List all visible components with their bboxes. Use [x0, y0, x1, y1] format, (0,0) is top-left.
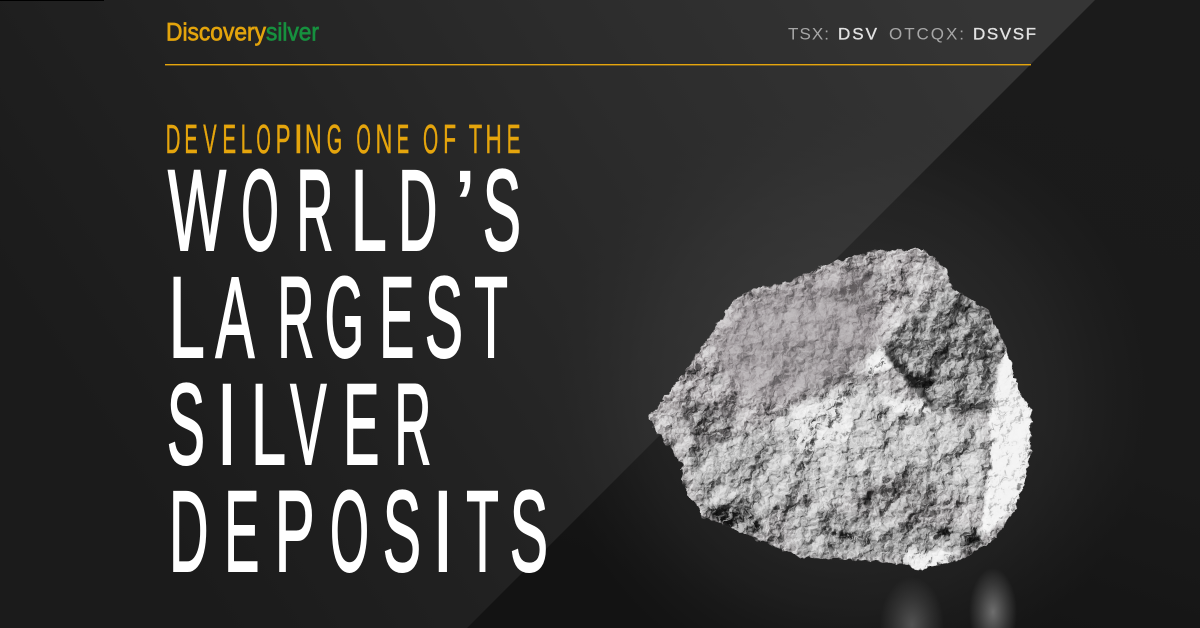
flat upper plane of the rock	[713, 270, 880, 403]
subtitle: F	[443, 116, 456, 162]
headline	[167, 147, 548, 596]
header rule	[165, 64, 1031, 65]
headline line 4: S	[383, 468, 421, 596]
subtitle: G	[327, 116, 342, 162]
subtitle: T	[469, 116, 482, 162]
headline line 4: E	[224, 468, 259, 596]
headline line 1: L	[351, 147, 387, 275]
headline line 1: R	[296, 147, 333, 275]
subtitle: O	[356, 116, 371, 162]
headline: S	[483, 147, 521, 275]
headline line 3: L	[251, 361, 286, 489]
headline line 1: ’	[453, 147, 477, 275]
headline line 1: O	[241, 147, 279, 275]
subtitle: I	[294, 116, 303, 162]
headline line 4: O	[330, 468, 369, 596]
stock tickers	[788, 24, 1036, 44]
headline line 1: D	[398, 147, 437, 275]
logo: Discovery Silver: silver	[266, 18, 319, 46]
subtitle: E	[397, 116, 409, 162]
headline: R	[394, 361, 431, 489]
rock reflections	[880, 568, 1017, 628]
infographic canvas: S	[510, 468, 548, 596]
bright right face and ridges	[862, 282, 1028, 530]
subtitle: E	[184, 116, 198, 162]
subtitle: O	[256, 116, 271, 162]
headline line 2: S	[425, 254, 463, 382]
subtitle: N	[376, 116, 392, 162]
subtitle: E	[507, 116, 520, 162]
stock tickers: DSVSF	[973, 24, 1036, 44]
headline line 3: S	[167, 361, 205, 489]
subtitle: L	[241, 116, 252, 162]
headline line 3: I	[217, 361, 237, 489]
stock tickers: OTCQX:	[889, 24, 964, 44]
subtitle: V	[203, 116, 217, 162]
stock tickers: TSX:	[788, 24, 829, 44]
subtitle: E	[222, 116, 236, 162]
headline line 2: E	[379, 254, 414, 382]
headline line 4: D	[169, 468, 208, 596]
silver rock	[648, 248, 1034, 570]
subtitle: O	[423, 116, 438, 162]
logo: Discovery Silver: Discovery	[166, 18, 266, 46]
headline line 2: A	[216, 254, 255, 382]
headline line 2: L	[169, 254, 205, 382]
subtitle: N	[305, 116, 322, 162]
headline line 4: T	[466, 468, 499, 596]
headline line 4: I	[433, 468, 453, 596]
subtitle: H	[486, 116, 502, 162]
subtitle: D	[166, 116, 180, 162]
headline line 4: P	[275, 468, 315, 596]
headline line 3: E	[343, 361, 379, 489]
subtitle: P	[276, 116, 290, 162]
headline line 3: V	[290, 361, 327, 489]
stock tickers: DSV	[838, 24, 878, 44]
headline line 2: G	[325, 254, 364, 382]
headline: T	[474, 254, 508, 382]
headline line 2: R	[278, 254, 314, 382]
headline line 1: W	[168, 147, 226, 275]
